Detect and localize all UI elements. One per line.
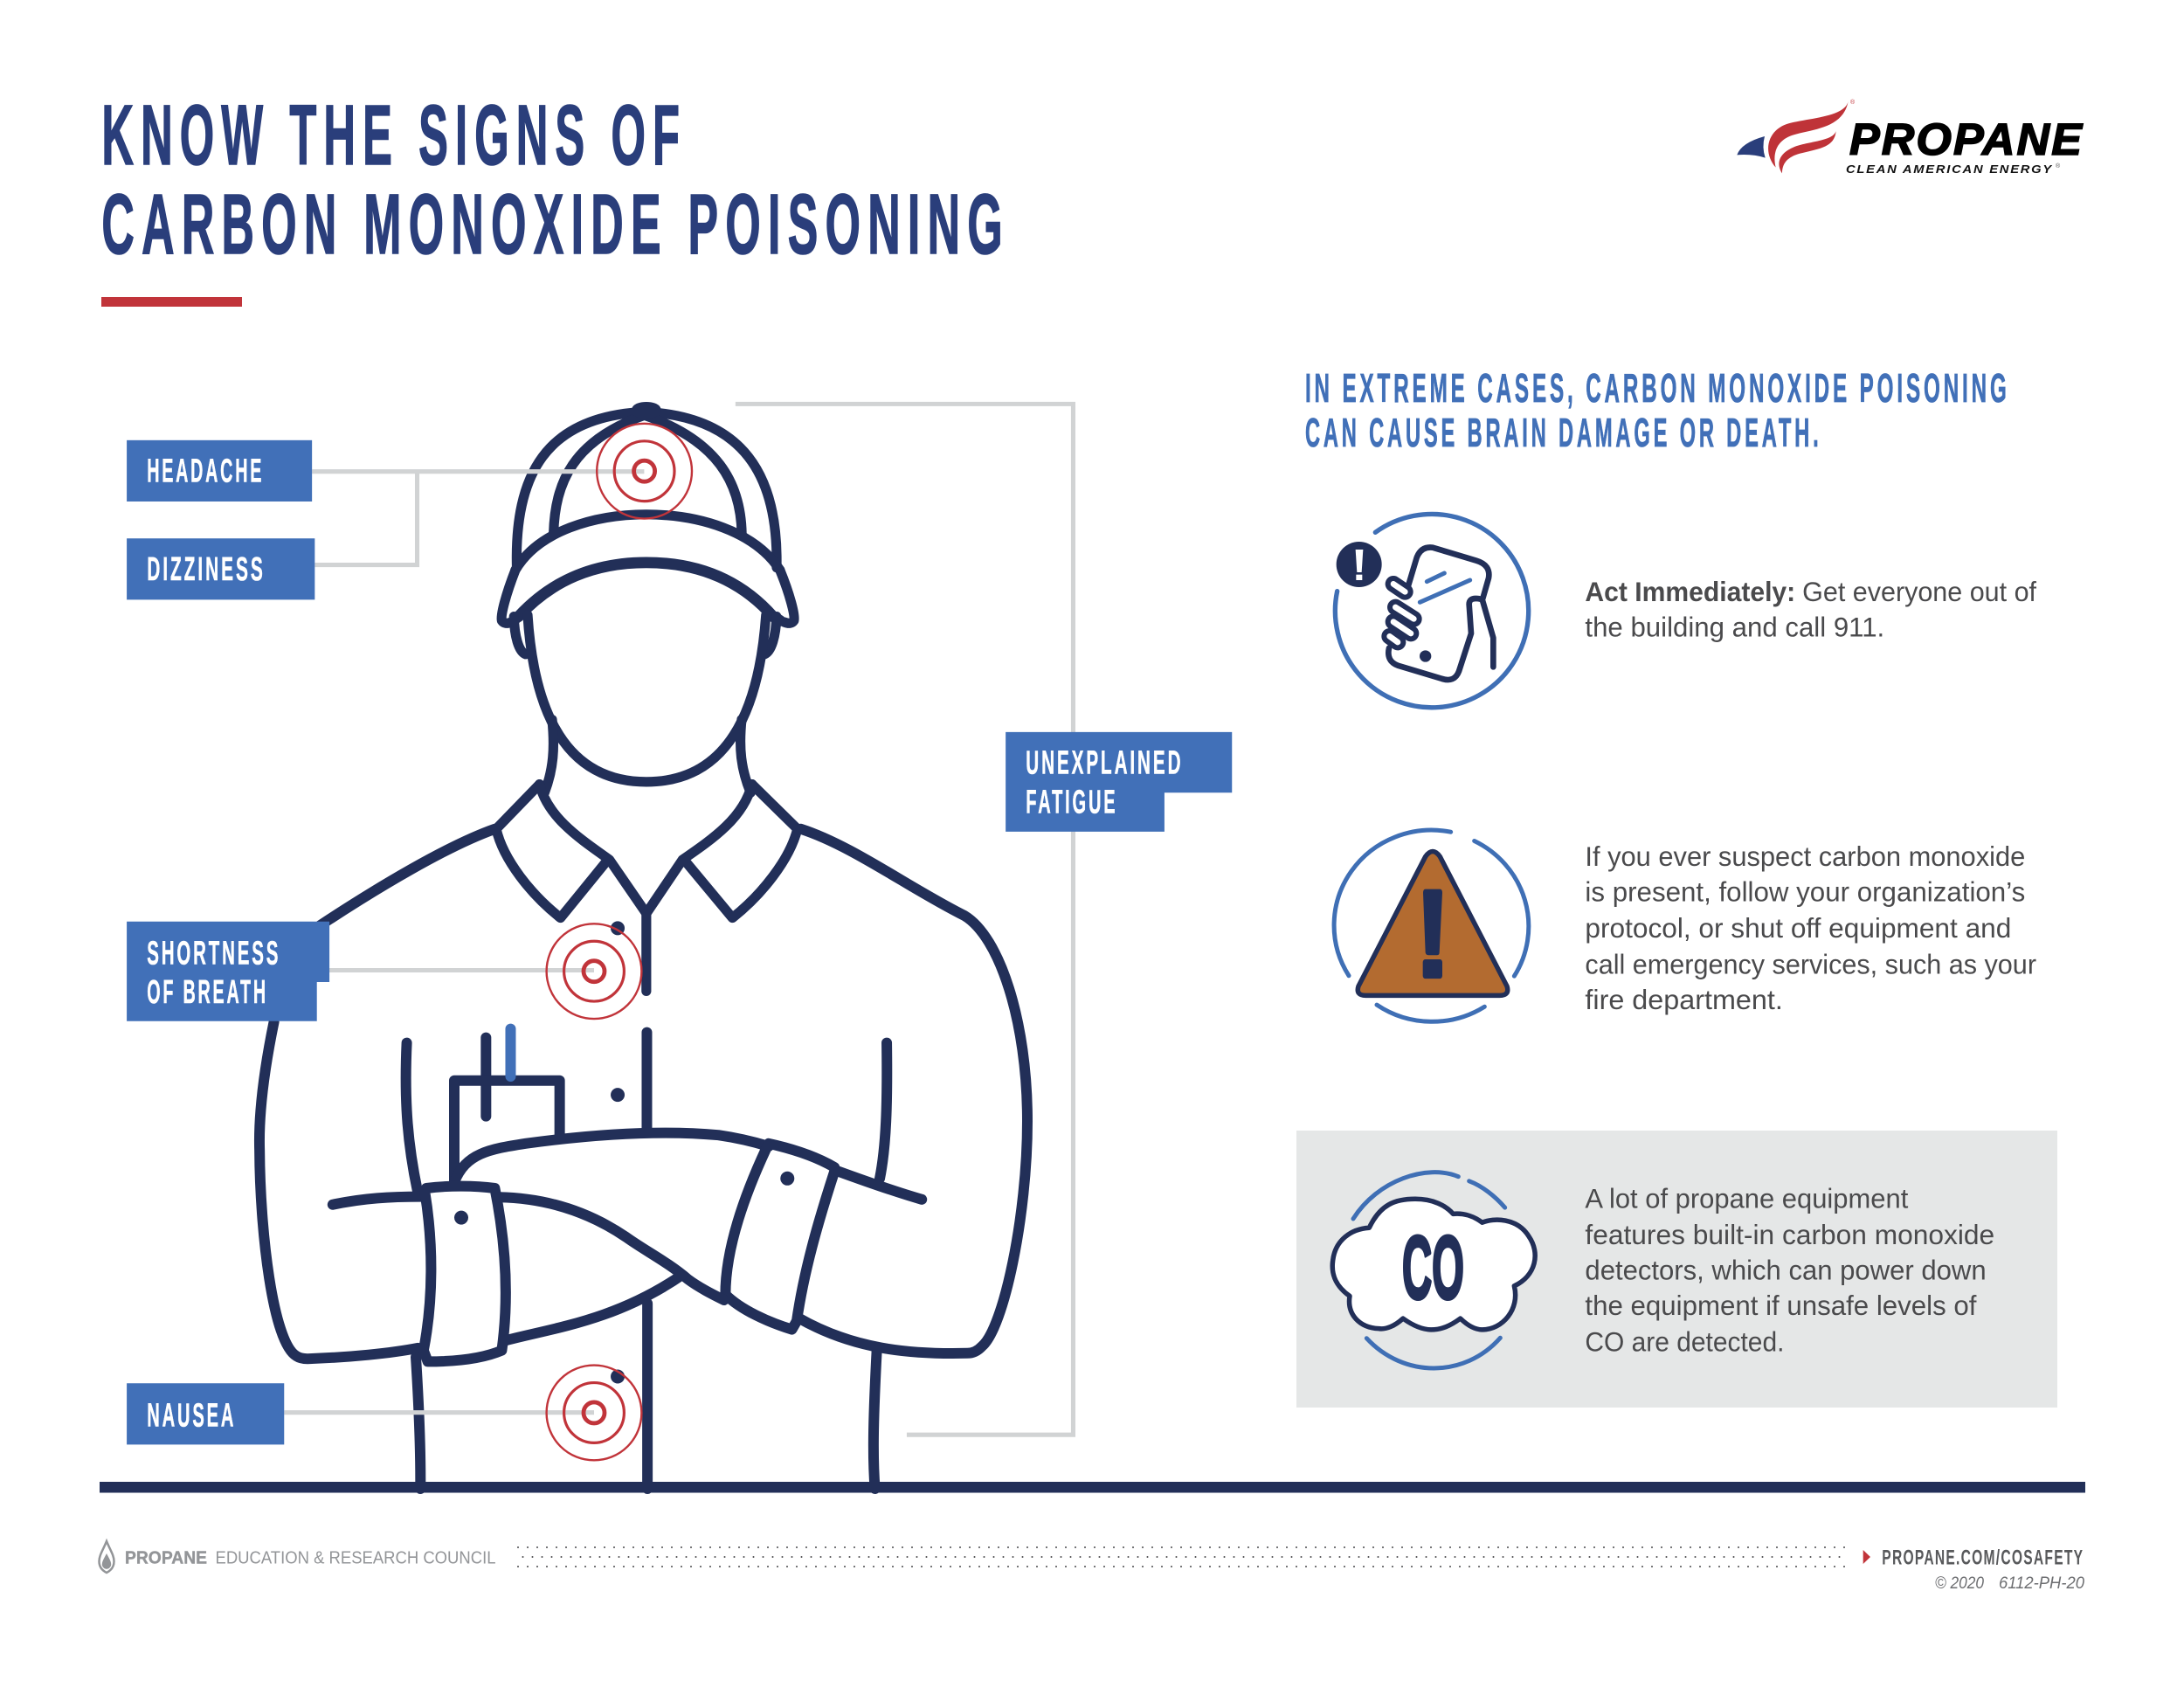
text: suspect carbon monoxide: call emergency services, such as your [1585, 949, 2036, 979]
title: KNOW THE SIGNS OF [101, 87, 687, 183]
icon: CO cloud: CO [1402, 1218, 1464, 1318]
label: headache: HEADACHE [147, 453, 264, 490]
icon: CO cloud [1332, 1173, 1535, 1368]
text: built-in detectors: the equipment if unsafe levels of [1585, 1290, 1977, 1321]
label: unexplained fatigue: FATIGUE [1026, 783, 1118, 820]
triangle [1358, 851, 1508, 995]
logo: Propane Clean American Energy: ® [2056, 163, 2061, 169]
copyright [1935, 1574, 2084, 1593]
fingers [1390, 584, 1413, 642]
logo: Propane Clean American Energy: ® [1850, 99, 1856, 106]
footer [100, 1541, 2084, 1593]
logo: Propane Clean American Energy [1737, 99, 2084, 176]
logo: Propane Clean American Energy: CLEAN AMERICAN ENERGY [1846, 163, 2053, 176]
text: suspect carbon monoxide: If you ever suspect carbon monoxide [1585, 841, 2025, 872]
icon: PERC flame [100, 1541, 114, 1573]
symptom target: chest [547, 924, 641, 1019]
collar [496, 785, 798, 991]
text: suspect carbon monoxide: is present, follow your organization’s [1585, 877, 2025, 908]
icon ring [1335, 514, 1529, 708]
label: dizziness: DIZZINESS [147, 550, 266, 588]
text: act immediately: Get everyone out of [1802, 577, 2036, 607]
illustration: worker with crossed arms [259, 407, 1027, 1489]
logo: Propane Clean American Energy: PROPANE [1849, 114, 2084, 164]
head and neck [514, 615, 777, 792]
title [101, 87, 1010, 272]
label: headache [127, 440, 312, 502]
symptom target: head [597, 424, 692, 519]
label: shortness of breath: SHORTNESS [147, 934, 280, 972]
text: suspect carbon monoxide: fire department. [1585, 985, 1783, 1015]
label: shortness of breath: OF BREATH [147, 973, 268, 1011]
label: shortness of breath [127, 922, 329, 1021]
text: built-in detectors: detectors, which can power down [1585, 1255, 1987, 1285]
text: built-in detectors: CO are detected. [1585, 1327, 1784, 1358]
text: built-in detectors: features built-in carbon monoxide [1585, 1220, 1994, 1250]
title underline [101, 297, 242, 307]
label: unexplained fatigue: UNEXPLAINED [1026, 744, 1183, 782]
text: suspect carbon monoxide [1585, 841, 2036, 1015]
exclamation mark [1423, 889, 1442, 979]
arrow [1863, 1550, 1870, 1564]
organisation name [125, 1548, 496, 1567]
symptom target: stomach [547, 1366, 641, 1460]
ground line [100, 1482, 2085, 1492]
blue pen in pocket [508, 1029, 514, 1076]
label: nausea: NAUSEA [147, 1397, 236, 1435]
phone [1388, 547, 1493, 680]
text: act immediately [1585, 577, 2036, 643]
copyright: © 2020 [1935, 1574, 1984, 1593]
home button [1420, 650, 1431, 662]
text: act immediately: Act Immediately: [1585, 577, 1795, 607]
text: built-in detectors: A lot of propane equipment [1585, 1183, 1909, 1214]
icon: hand holding phone [1335, 514, 1529, 708]
torso and arms [259, 829, 1027, 1489]
subheading [1305, 365, 2010, 455]
organisation name: EDUCATION & RESEARCH COUNCIL [215, 1548, 496, 1567]
text: suspect carbon monoxide: protocol, or shut off equipment and [1585, 913, 2011, 944]
organisation name: PROPANE [125, 1548, 207, 1567]
icon ring [1334, 830, 1529, 1021]
title: CARBON MONOXIDE POISONING [101, 176, 1010, 272]
hat [501, 407, 794, 623]
label: dizziness [127, 538, 314, 599]
alert badge [1337, 542, 1382, 587]
label: nausea [127, 1383, 284, 1444]
connector lines [284, 404, 1073, 1435]
label: unexplained fatigue [1006, 732, 1232, 832]
text: built-in detectors [1585, 1183, 1994, 1358]
screen glare [1420, 573, 1470, 602]
website link: PROPANE.COM/COSAFETY [1882, 1546, 2084, 1569]
text: act immediately: the building and call 911. [1585, 612, 1884, 643]
panel: CO detectors [1296, 1131, 2057, 1408]
shirt buttons [454, 921, 794, 1384]
icon: warning triangle [1334, 830, 1529, 1021]
copyright: 6112-PH-20 [1999, 1574, 2084, 1593]
